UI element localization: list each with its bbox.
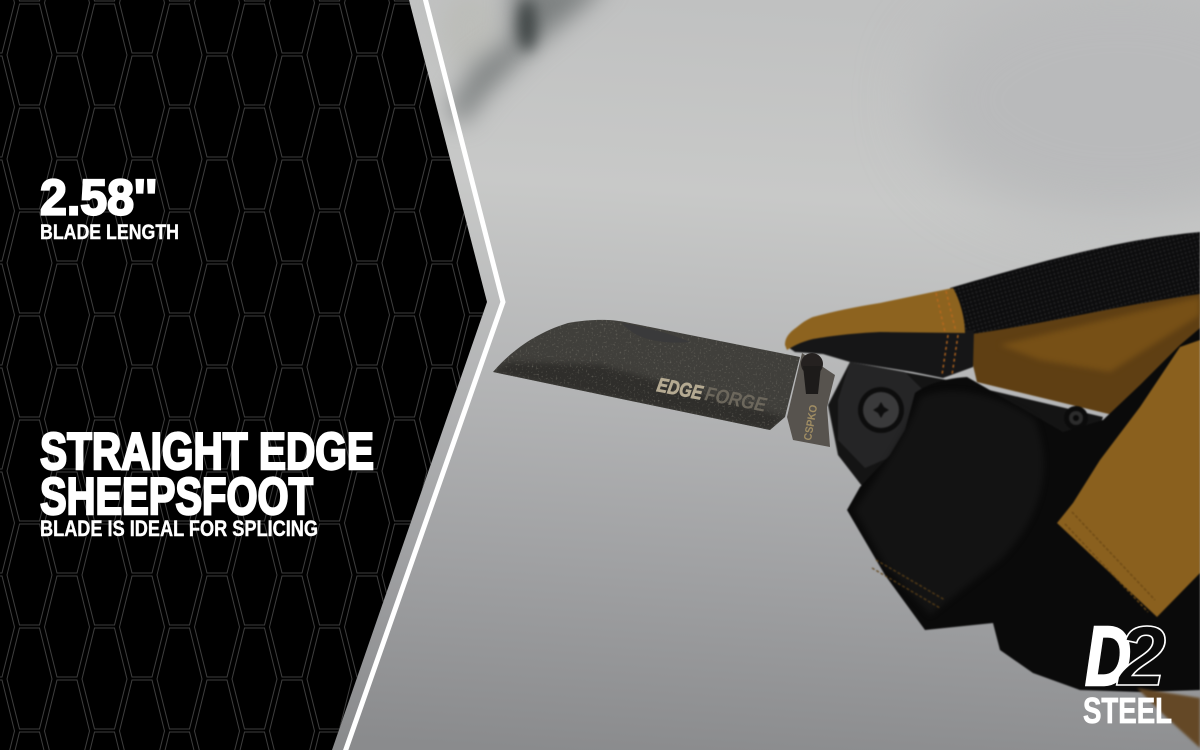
D2 mark: 2	[1116, 609, 1166, 703]
heading line 2: SHEEPSFOOT	[40, 468, 313, 526]
D2 mark: D	[1085, 609, 1131, 703]
steel label: STEEL	[1083, 690, 1172, 731]
glove: black finger and wrist	[847, 328, 1200, 692]
glove: lower tan strap	[1137, 688, 1200, 748]
glove: tan thumb tip	[785, 288, 965, 350]
knife handle	[828, 362, 1103, 486]
stat: blade type	[40, 423, 374, 541]
photo: pocket knife blade	[490, 315, 835, 447]
photo: hand in glove holding the knife	[785, 232, 1200, 748]
blade logo: EDGE	[655, 374, 705, 405]
stat: blade length	[40, 170, 179, 244]
badge: D2 steel	[1083, 609, 1172, 731]
tang	[787, 353, 835, 447]
finger knit highlight	[855, 391, 1044, 615]
panel: black hexagon chevron	[0, 0, 487, 750]
blade body	[493, 320, 800, 430]
label: BLADE LENGTH	[40, 220, 179, 244]
glove: black thumb underside	[785, 330, 974, 378]
glove: tan palm	[965, 293, 1200, 415]
lock pin	[801, 353, 823, 375]
heading line 1: STRAIGHT EDGE	[40, 423, 374, 481]
description: BLADE IS IDEAL FOR SPLICING	[40, 516, 318, 541]
thumb opening	[622, 323, 690, 343]
screw star socket	[873, 402, 889, 418]
glove: tan cuff patch	[1057, 340, 1200, 617]
chevron outline	[345, 0, 503, 750]
photo: pocket knife blade: FORGE	[703, 383, 769, 417]
value: 2.58''	[40, 170, 157, 226]
handle screw	[858, 387, 904, 433]
blade stonewash texture	[496, 320, 798, 428]
tang engraving: CSPKO	[802, 404, 820, 442]
small rear screw	[1064, 406, 1088, 430]
glove: black knit back	[950, 232, 1200, 335]
